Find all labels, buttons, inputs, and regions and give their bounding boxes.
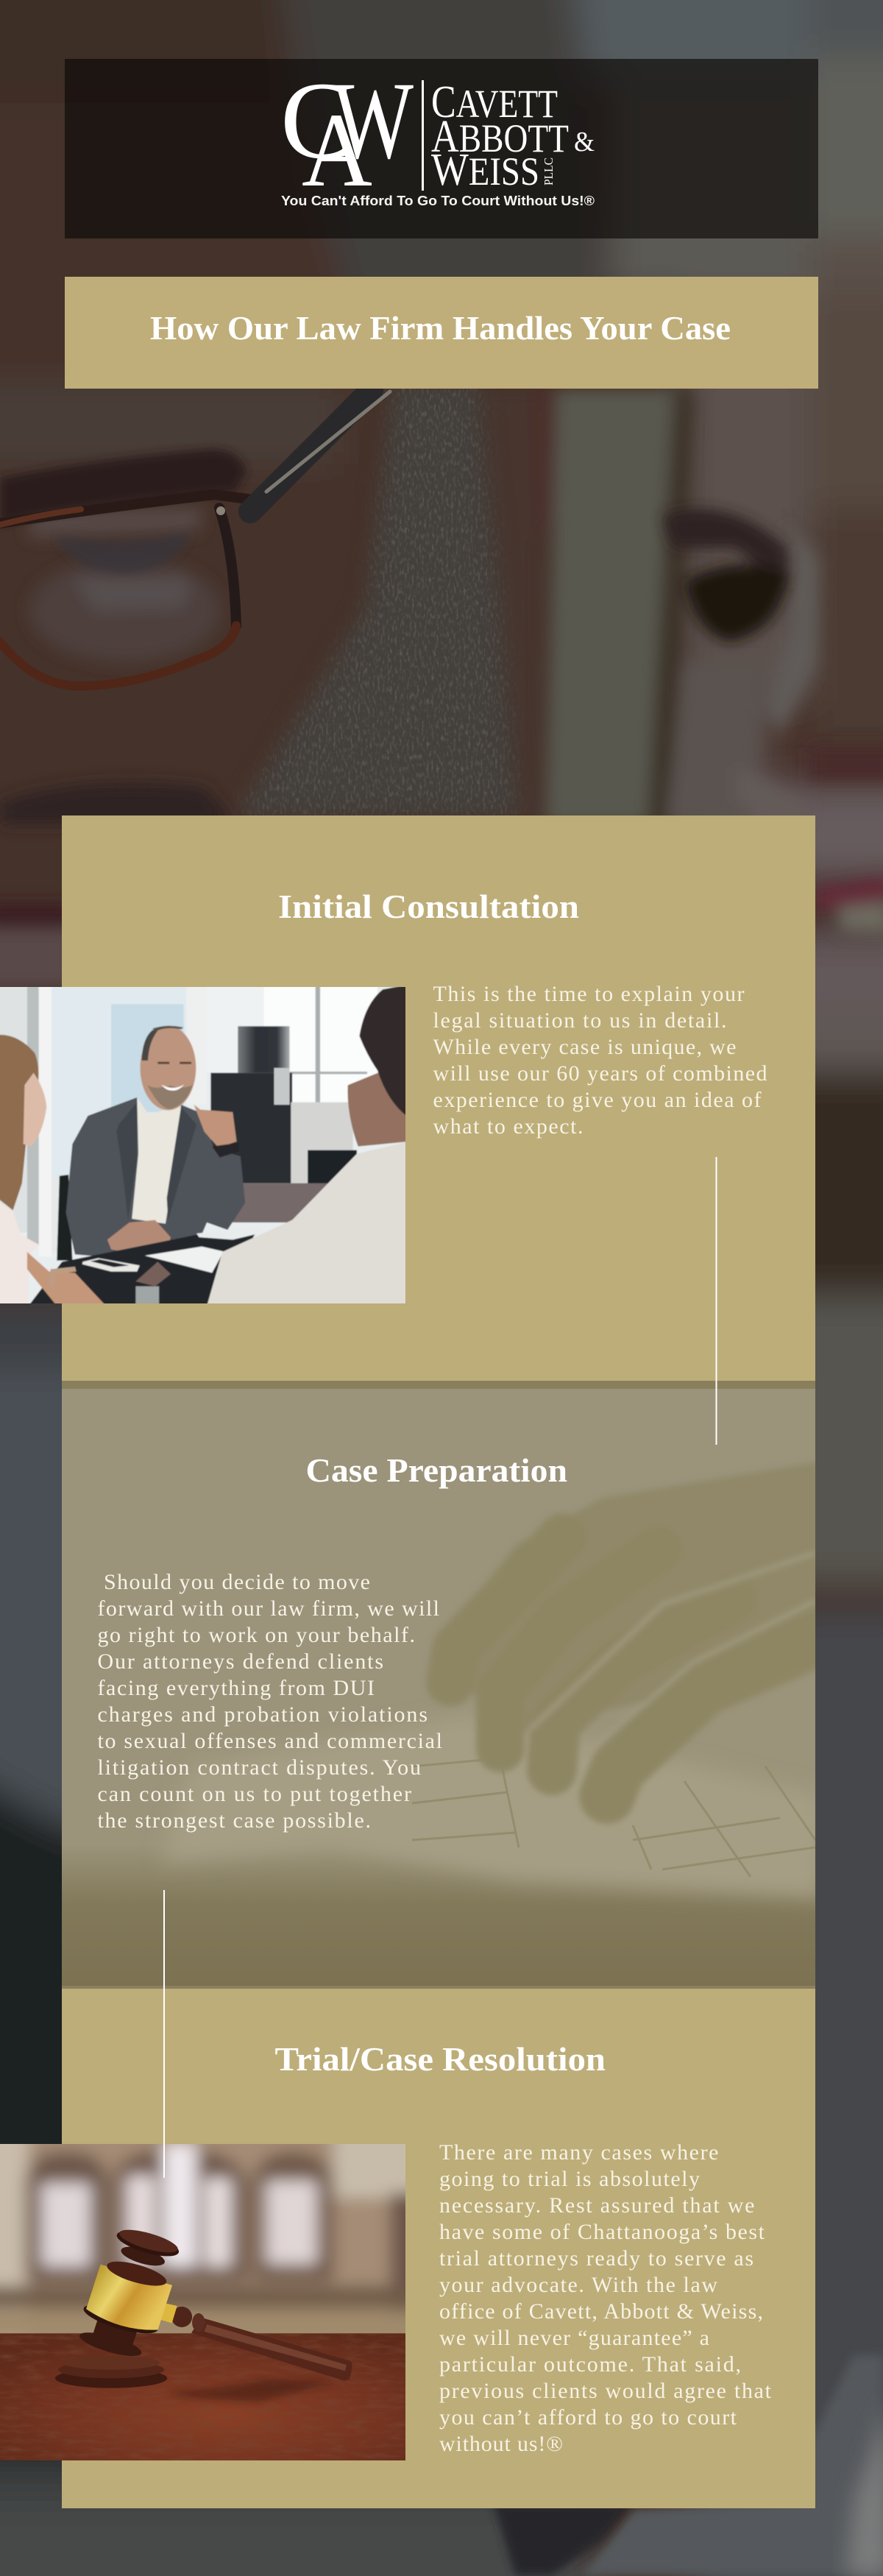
text block: trial and case resolution: trial attorneys ready to serve as	[439, 2246, 753, 2271]
connector line: consultation to preparation	[715, 1157, 717, 1445]
text block: trial and case resolution: previous clients would agree that	[439, 2379, 772, 2403]
client on right	[207, 1142, 408, 1306]
text block: initial consultation	[433, 982, 767, 1139]
text block: trial and case resolution	[439, 2140, 772, 2456]
heading: initial consultation: Initial Consultation	[278, 888, 579, 925]
glass table	[29, 1232, 256, 1306]
text block: initial consultation: This is the time to explain your	[433, 982, 745, 1006]
gavel sound block	[55, 2356, 167, 2388]
text block: trial and case resolution: particular outcome. That said,	[439, 2352, 741, 2377]
photo: attorney meeting with clients	[0, 987, 405, 1303]
man's beard	[241, 389, 522, 815]
text block: trial and case resolution: There are many cases where	[439, 2140, 718, 2165]
text block: case preparation: charges and probation violations	[97, 1702, 428, 1727]
seated attorney	[57, 1175, 72, 1261]
gavel	[73, 2222, 352, 2381]
text block: case preparation: to sexual offenses and commercial	[97, 1729, 442, 1753]
logo panel	[65, 59, 818, 238]
connector line: preparation to resolution	[163, 1890, 165, 2178]
heading: trial and case resolution: Trial/Case Resolution	[275, 2040, 606, 2078]
text block: initial consultation: While every case is unique, we	[433, 1035, 736, 1059]
logo wordmark: PLLC	[542, 158, 556, 185]
text block: initial consultation: legal situation to us in detail.	[433, 1008, 727, 1033]
woman's hair, skin folds and man's ear	[0, 390, 883, 988]
title: How Our Law Firm Handles Your Case	[150, 309, 731, 347]
closed eye	[56, 531, 191, 574]
logo monogram CAW: A	[302, 92, 372, 209]
panel: initial consultation	[62, 815, 815, 1381]
man's lens area and goatee	[0, 508, 235, 824]
text block: initial consultation: experience to give you an idea of	[433, 1088, 761, 1112]
text block: trial and case resolution: have some of Chattanooga’s best	[439, 2220, 765, 2244]
logo monogram CAW: W	[333, 60, 414, 182]
text block: initial consultation: what to expect.	[433, 1114, 583, 1139]
text block: case preparation: Should you decide to move	[104, 1570, 370, 1594]
text block: case preparation: go right to work on your behalf.	[97, 1623, 415, 1647]
logo wordmark	[431, 77, 595, 195]
text block: case preparation: Our attorneys defend clients	[97, 1649, 383, 1674]
panel: case preparation	[62, 1381, 824, 1989]
text block: trial and case resolution: we will never “guarantee” a	[439, 2326, 709, 2350]
wooden table	[0, 2333, 405, 2460]
logo wordmark: CAVETT	[431, 77, 558, 127]
title banner	[65, 277, 818, 389]
text block: case preparation: the strongest case possible.	[97, 1808, 371, 1833]
panel: trial and case resolution	[62, 1986, 815, 2508]
photo: gavel in courtroom	[0, 2144, 405, 2460]
text block: trial and case resolution: without us!®	[439, 2432, 563, 2456]
text block: case preparation: can count on us to put together	[97, 1782, 411, 1806]
text block: trial and case resolution: office of Cavett, Abbott & Weiss,	[439, 2299, 763, 2324]
logo monogram CAW: C	[280, 60, 354, 182]
heading: case preparation: Case Preparation	[306, 1451, 567, 1489]
text block: initial consultation: will use our 60 years of combined	[433, 1061, 767, 1086]
text block: trial and case resolution: necessary. Rest assured that we	[439, 2193, 755, 2218]
logo wordmark: &	[574, 127, 595, 158]
text block: case preparation	[97, 1570, 442, 1833]
text block: trial and case resolution: your advocate. With the law	[439, 2273, 717, 2297]
text block: trial and case resolution: going to trial is absolutely	[439, 2167, 700, 2191]
text block: case preparation: facing everything from DUI	[97, 1676, 375, 1700]
logo wordmark: WEISS	[431, 145, 539, 195]
keyboard and typing hands photo	[162, 1461, 824, 1899]
logo wordmark: ABBOTT	[431, 112, 569, 162]
woman's eye	[662, 509, 789, 642]
logo monogram CAW	[280, 60, 414, 209]
client on left	[0, 1035, 38, 1210]
sweater bottom	[581, 2355, 883, 2576]
logo tagline: You Can't Afford To Go To Court Without Us!®	[281, 193, 595, 208]
eyebrow	[0, 449, 247, 524]
glasses	[0, 390, 390, 686]
logo divider	[422, 80, 424, 191]
text block: trial and case resolution: you can’t afford to go to court	[439, 2405, 737, 2430]
text block: case preparation: litigation contract disputes. You	[97, 1755, 421, 1780]
text block: case preparation: forward with our law firm, we will	[97, 1596, 439, 1621]
